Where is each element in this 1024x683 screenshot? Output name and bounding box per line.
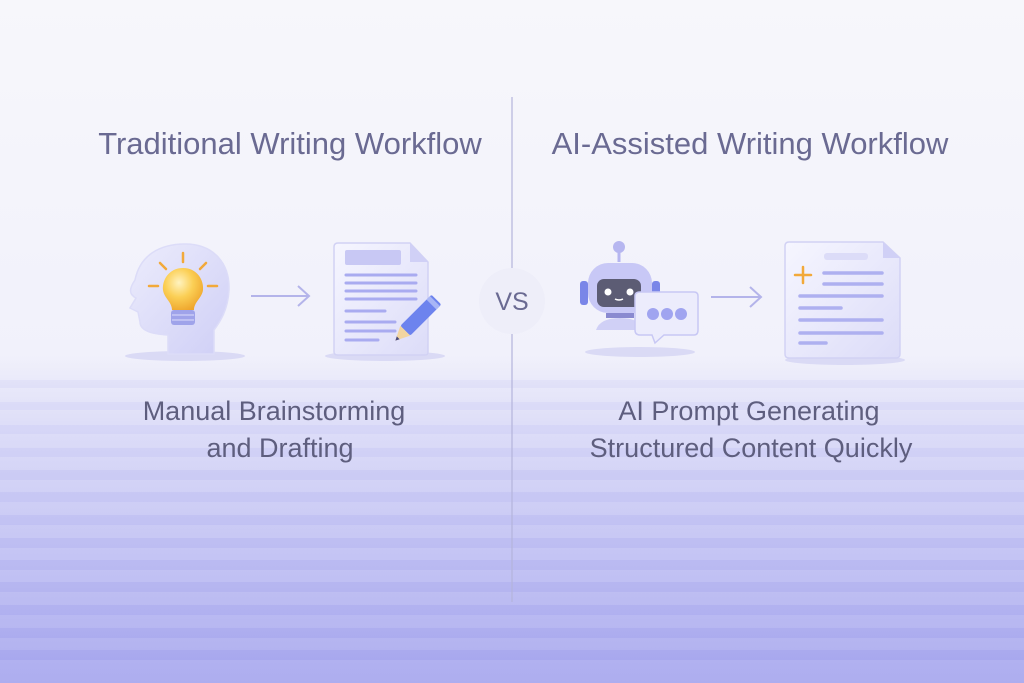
icon: head with lightbulb (125, 244, 245, 361)
caption: AI-assisted: Structured Content Quickly (590, 433, 913, 463)
icon: generated document (785, 242, 905, 365)
icon: robot with chat bubble (580, 241, 698, 357)
arrow: left (251, 286, 309, 306)
caption: traditional: Manual Brainstorming (143, 396, 405, 426)
caption: AI-assisted: AI Prompt Generating (618, 396, 880, 426)
icon: document with pencil (325, 243, 445, 361)
arrow: right (711, 287, 761, 307)
caption: traditional: and Drafting (206, 433, 354, 463)
divider line (511, 97, 513, 602)
title: traditional: Traditional Writing Workflow (98, 126, 482, 161)
title: AI-assisted: AI-Assisted Writing Workflow (552, 126, 949, 161)
VS badge: VS (495, 288, 529, 316)
VS badge (479, 268, 545, 334)
